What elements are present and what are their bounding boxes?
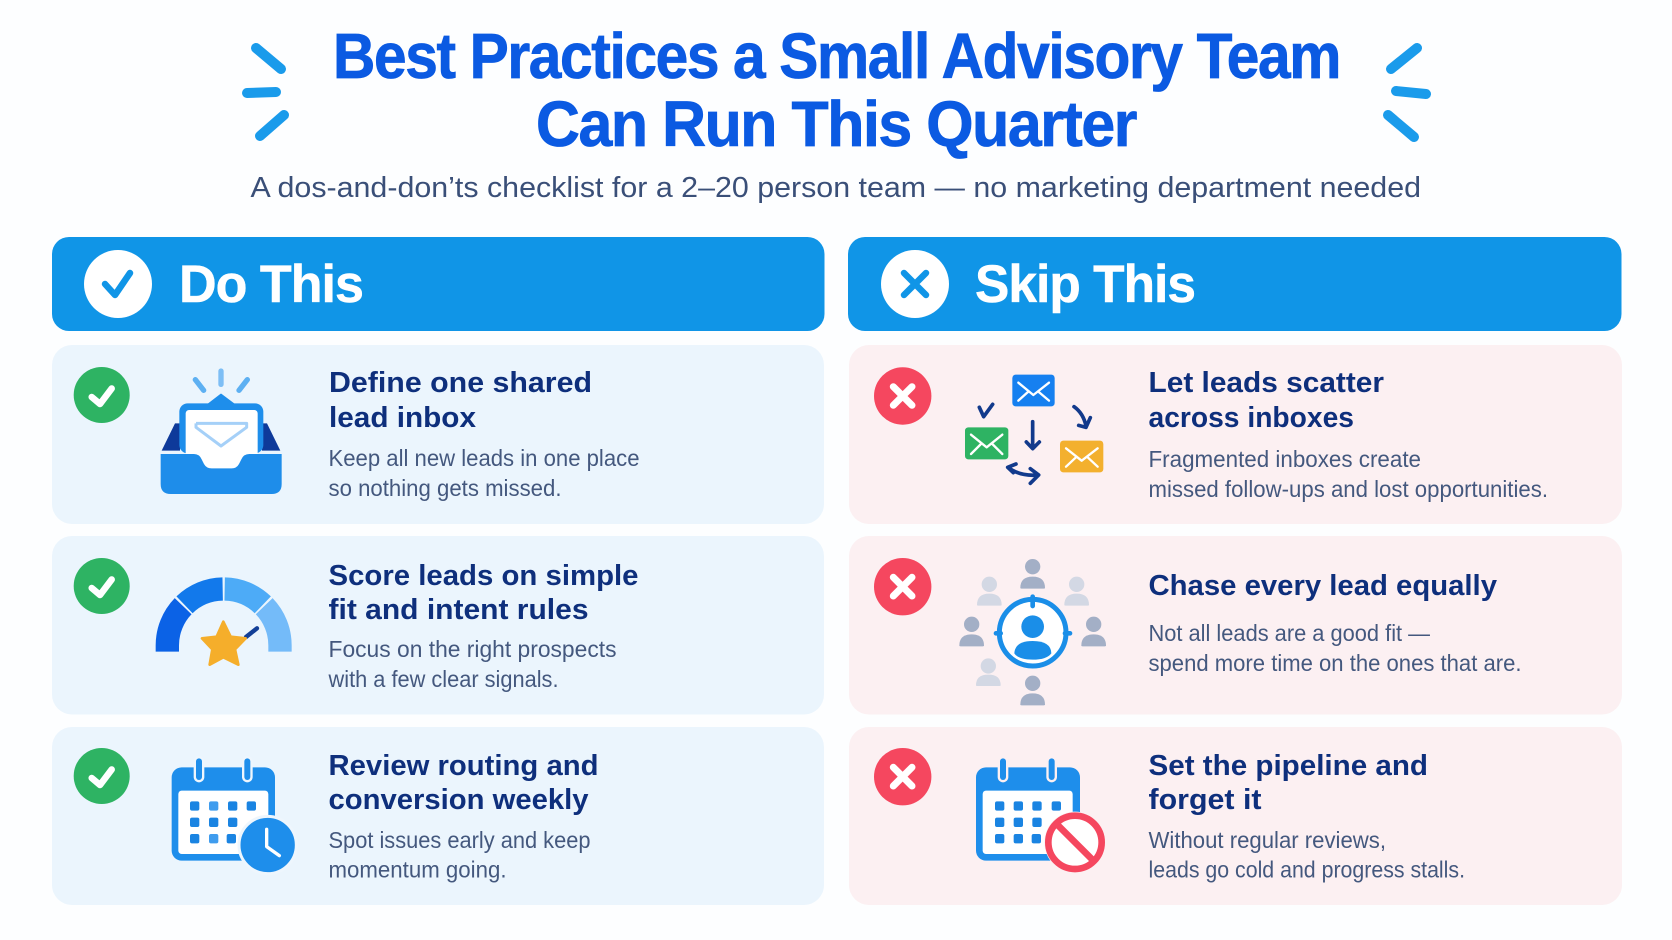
text: define one shared lead inbox: Keep all new leads in one place xyxy=(328,445,640,471)
text: chase every lead: Chase every lead equally xyxy=(1148,570,1497,602)
text: let leads scatter: Let leads scatter xyxy=(1148,367,1384,399)
heading: Skip This: Skip This xyxy=(975,255,1195,314)
text: let leads scatter xyxy=(1148,367,1548,502)
text: let leads scatter: missed follow-ups and lost opportunities. xyxy=(1148,476,1548,502)
text: chase every lead: spend more time on the ones that are. xyxy=(1148,650,1522,676)
text: set and forget xyxy=(1148,750,1465,882)
icon: red cross xyxy=(874,558,931,615)
icon: red cross xyxy=(874,367,931,425)
text: review routing: conversion weekly xyxy=(328,784,588,816)
text: let leads scatter: across inboxes xyxy=(1148,402,1354,434)
text: score leads xyxy=(328,560,638,692)
panel: review routing xyxy=(52,727,824,905)
panel: chase every lead xyxy=(849,536,1622,714)
text: set and forget: leads go cold and progress stalls. xyxy=(1148,856,1465,882)
text: define one shared lead inbox: Define one shared xyxy=(329,367,592,399)
text: review routing xyxy=(328,750,598,882)
icon: inbox tray xyxy=(161,371,282,494)
title: Best Practices a Small Advisory Team xyxy=(333,20,1340,92)
text: chase every lead xyxy=(1148,570,1522,676)
icon: green check xyxy=(74,558,130,614)
icon: target among people xyxy=(959,559,1106,705)
text: set and forget: forget it xyxy=(1148,784,1262,816)
icon: header cross xyxy=(881,250,949,318)
text: review routing: momentum going. xyxy=(328,856,506,882)
panel: Do This header xyxy=(52,237,824,331)
icon: red cross xyxy=(874,748,931,805)
heading: Do This: Do This xyxy=(179,255,363,314)
text: review routing: Review routing and xyxy=(328,750,598,782)
title xyxy=(333,20,1340,160)
icon: scattered envelopes xyxy=(965,375,1103,483)
text: chase every lead: Not all leads are a good fit — xyxy=(1148,620,1430,646)
icon: calendar with clock xyxy=(172,761,296,874)
text: score leads: with a few clear signals. xyxy=(328,666,558,692)
text: let leads scatter: Fragmented inboxes create xyxy=(1148,446,1421,472)
panel: define one shared lead inbox xyxy=(52,345,824,524)
text: score leads: fit and intent rules xyxy=(328,594,588,626)
text: score leads: Score leads on simple xyxy=(328,560,638,592)
icon: calendar with prohibition sign xyxy=(976,761,1106,873)
icon: green check xyxy=(74,748,130,804)
subtitle: A dos-and-don’ts checklist for a 2–20 person team — no marketing department needed xyxy=(250,172,1421,204)
icon: green check xyxy=(74,367,130,423)
text: define one shared lead inbox: so nothing gets missed. xyxy=(328,475,562,501)
text: define one shared lead inbox: lead inbox xyxy=(329,402,476,434)
icon: header check xyxy=(84,250,152,318)
title: Can Run This Quarter xyxy=(536,88,1137,160)
panel: set and forget xyxy=(849,727,1622,905)
panel: Skip This header xyxy=(848,237,1622,331)
text: score leads: Focus on the right prospects xyxy=(328,636,616,662)
text: set and forget: Set the pipeline and xyxy=(1148,750,1428,782)
panel: let leads scatter xyxy=(849,345,1622,524)
panel: score leads xyxy=(52,536,824,714)
icon: left sparks xyxy=(247,48,284,136)
text: set and forget: Without regular reviews, xyxy=(1148,827,1386,853)
icon: right sparks xyxy=(1388,48,1426,137)
text: define one shared lead inbox xyxy=(328,367,640,501)
icon: score gauge with star xyxy=(167,589,280,665)
text: review routing: Spot issues early and keep xyxy=(328,827,590,853)
